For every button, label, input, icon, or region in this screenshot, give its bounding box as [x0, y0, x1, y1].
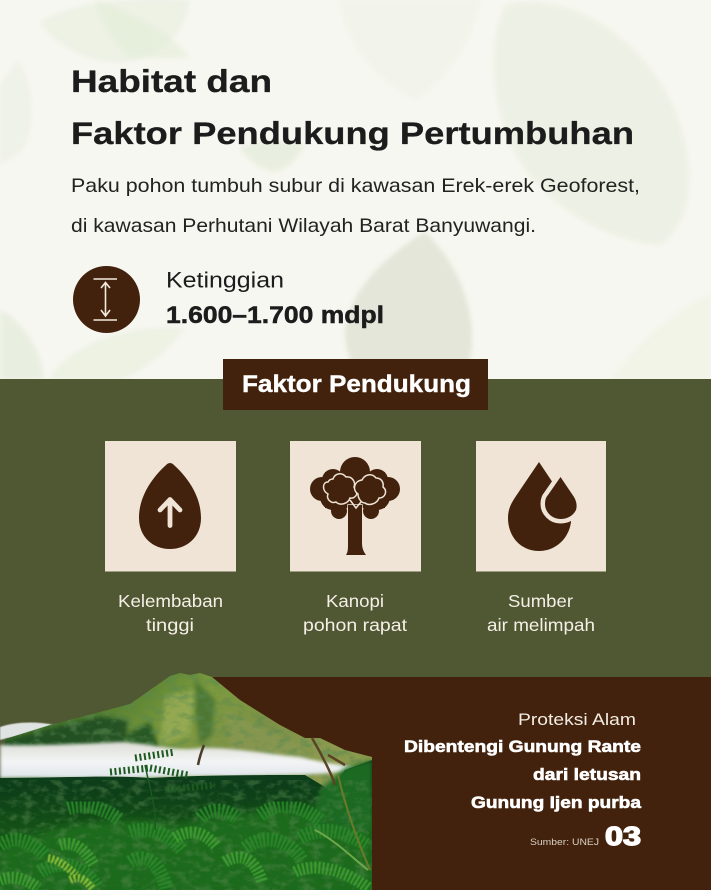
label: Kanopi pohon rapat: pohon rapat	[303, 615, 407, 635]
label: Sumber air melimpah: air melimpah	[487, 615, 595, 635]
label: Kanopi pohon rapat	[303, 591, 407, 635]
photo: mountain and fern forest	[0, 670, 372, 890]
label: Kanopi pohon rapat: Kanopi	[326, 591, 384, 611]
fern fronds	[0, 806, 368, 888]
cloud band	[0, 742, 356, 778]
intro text	[71, 175, 640, 237]
mountain	[0, 670, 372, 790]
label: Sumber air melimpah	[487, 591, 595, 635]
sapling and dry stems	[110, 738, 370, 870]
panel: green background	[0, 379, 711, 890]
title: Habitat dan	[71, 63, 272, 99]
title	[71, 63, 634, 151]
label: Sumber air melimpah: Sumber	[508, 591, 573, 611]
card: canopy	[290, 441, 421, 572]
heading: Faktor Pendukung: Faktor Pendukung	[242, 371, 471, 398]
panel: brown footer	[205, 677, 711, 890]
callout: Proteksi Alam: Gunung Ijen purba	[471, 793, 642, 812]
icon: elevation	[73, 266, 140, 333]
label: Kelembaban tinggi: Kelembaban	[118, 591, 223, 611]
card: water	[476, 441, 606, 572]
icon: water drops	[508, 462, 577, 551]
callout: Proteksi Alam	[404, 710, 642, 812]
intro text: Paku pohon tumbuh subur di kawasan Erek-erek Geoforest,	[71, 175, 640, 197]
elevation text	[166, 268, 384, 329]
background: pale paper with pressed leaves	[0, 0, 711, 395]
source note: Sumber: UNEJ	[530, 837, 599, 848]
icon: tree	[310, 457, 400, 555]
page number: 03	[605, 823, 641, 851]
elevation text: 1.600–1.700 mdpl	[166, 302, 384, 329]
card: humidity	[105, 441, 236, 572]
title: Faktor Pendukung Pertumbuhan	[71, 115, 634, 151]
label: Kelembaban tinggi	[118, 591, 223, 635]
intro text: di kawasan Perhutani Wilayah Barat Banyuwangi.	[71, 215, 536, 237]
small cloud	[0, 723, 55, 740]
callout: Proteksi Alam: dari letusan	[533, 765, 641, 784]
elevation text: Ketinggian	[166, 268, 284, 292]
callout: Proteksi Alam: Dibentengi Gunung Rante	[404, 737, 641, 756]
callout: Proteksi Alam: Proteksi Alam	[518, 710, 636, 729]
icon: drop with up arrow	[139, 463, 201, 549]
forest	[0, 760, 372, 890]
label: Kelembaban tinggi: tinggi	[146, 615, 194, 635]
heading: Faktor Pendukung	[223, 359, 488, 410]
